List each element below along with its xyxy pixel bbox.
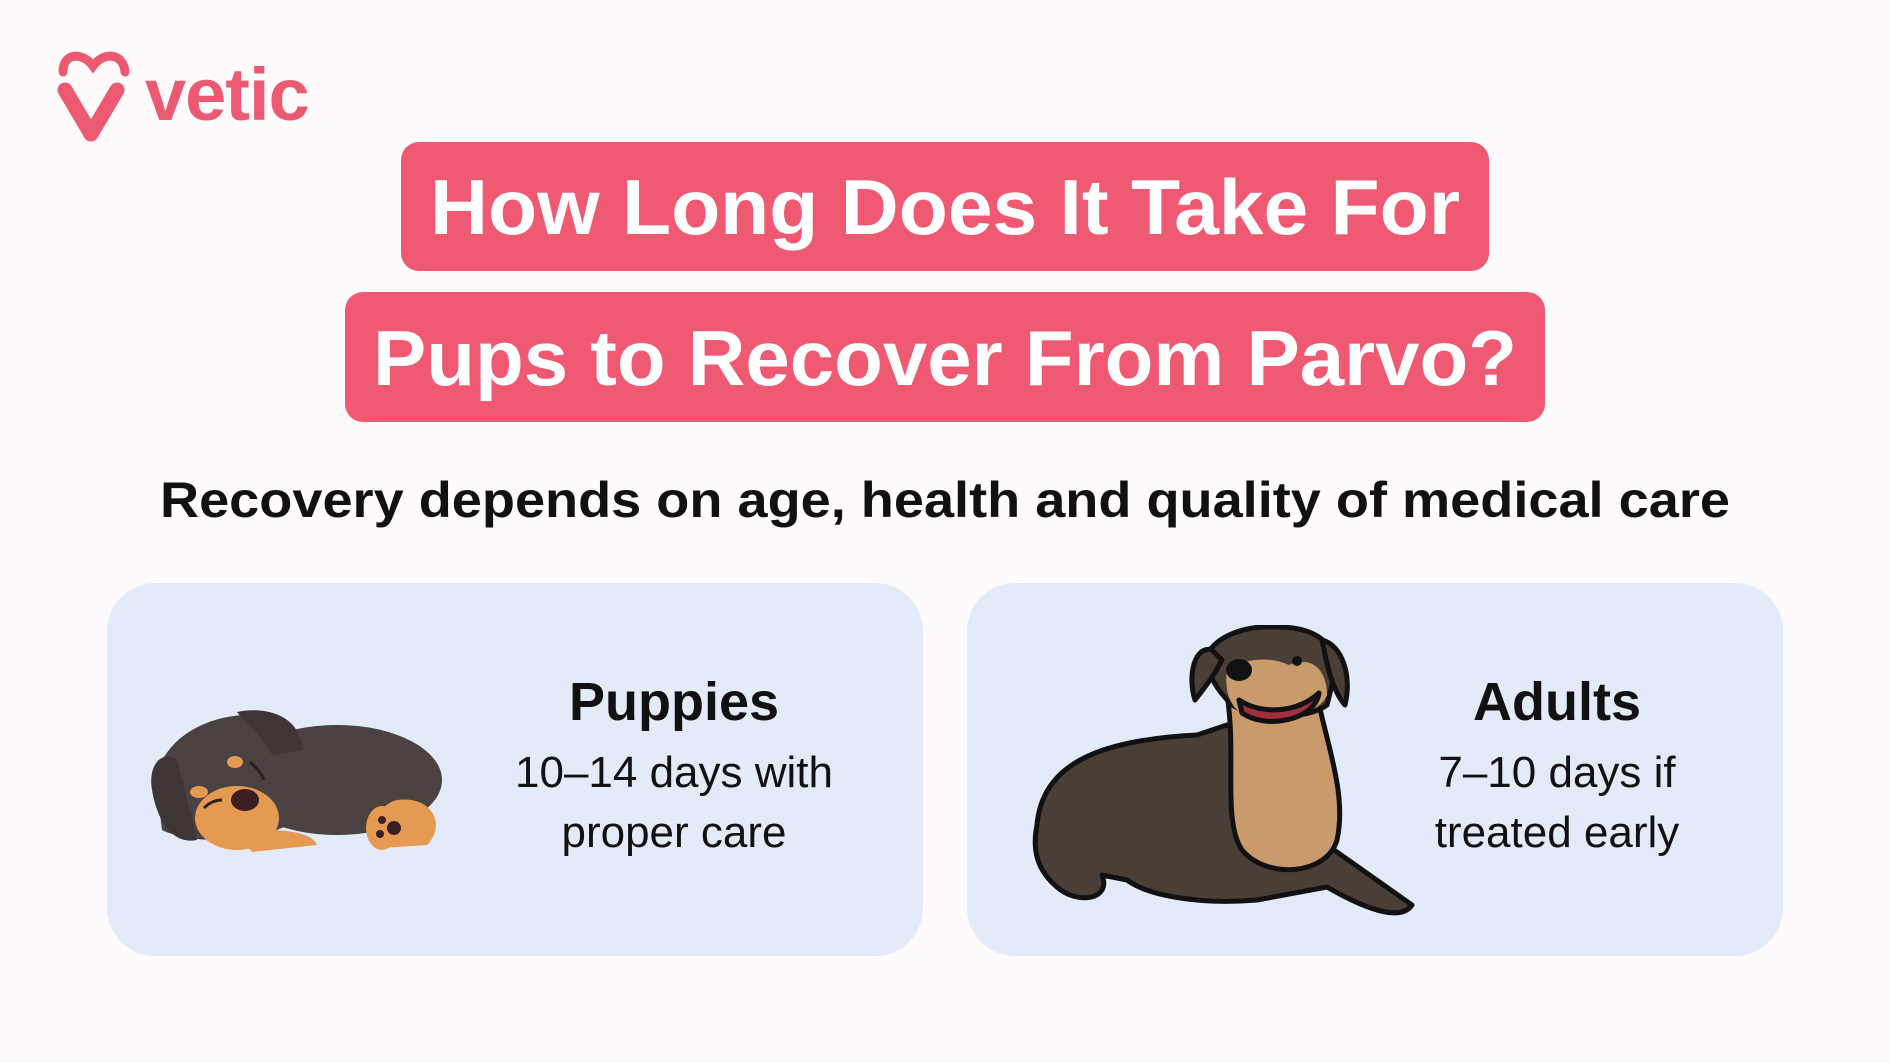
logo — [58, 52, 309, 142]
adults text — [1435, 748, 1680, 857]
subtitle: Recovery depends on age, health and quality of medical care — [160, 472, 1730, 528]
icon: heart V — [58, 52, 130, 142]
panel: puppies — [107, 583, 923, 956]
adults text: treated early — [1435, 808, 1679, 857]
puppies heading: Puppies — [569, 672, 779, 732]
adults heading: Adults — [1473, 672, 1641, 732]
panel: adults — [967, 583, 1783, 956]
icon: sleeping puppy — [151, 710, 442, 852]
puppies text: proper care — [561, 808, 786, 857]
title line 1 — [401, 142, 1489, 271]
title line 2: Pups to Recover From Parvo? — [373, 314, 1517, 402]
puppies text: 10–14 days with — [515, 748, 833, 797]
adults text: 7–10 days if — [1438, 748, 1676, 797]
puppies text — [515, 748, 833, 857]
icon: lying adult dog — [1032, 625, 1414, 916]
title line 2 — [345, 292, 1545, 422]
logo text: vetic — [145, 53, 309, 136]
title line 1: How Long Does It Take For — [430, 163, 1460, 251]
title — [345, 142, 1545, 422]
